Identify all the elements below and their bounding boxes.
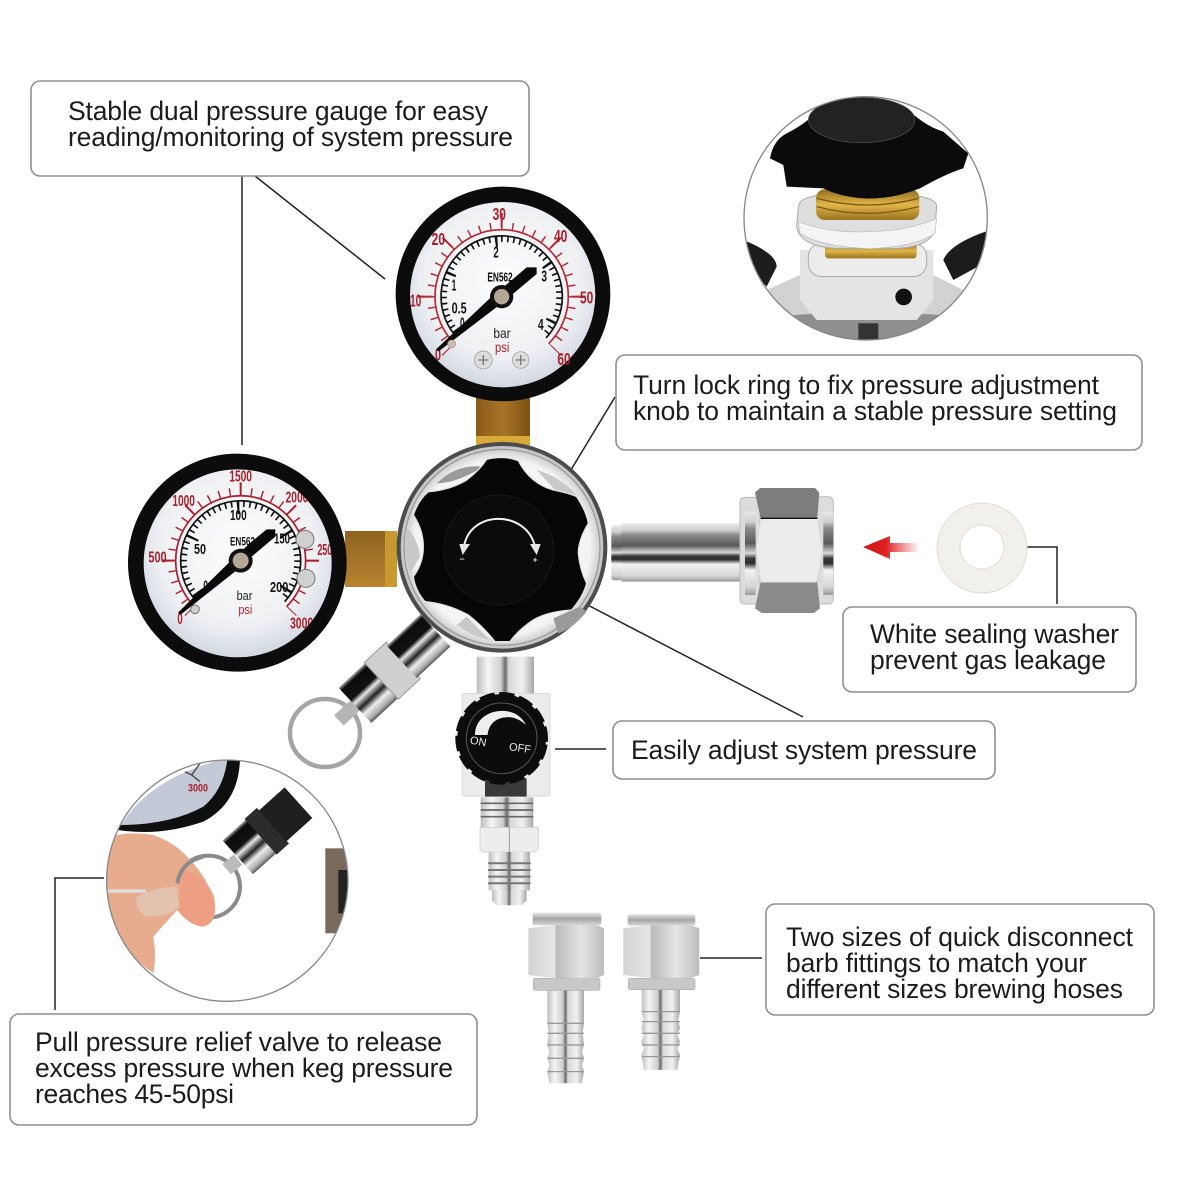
leader line: washer: [1021, 547, 1057, 604]
callout: barb fittings: Two sizes of quick disconnect: [786, 922, 1134, 952]
psi numbers: 3000: [290, 615, 313, 632]
background gauge right: [943, 232, 986, 280]
red arrow to nut: [863, 536, 920, 559]
hex bottom: [755, 582, 820, 613]
red scale arc: [176, 496, 306, 607]
black minor ticks: [184, 504, 297, 599]
relief valve with pull ring: [290, 612, 452, 767]
valve body: [462, 693, 550, 796]
bezel: [396, 187, 610, 401]
callout: lock ring: Turn lock ring to fix pressure adjustment: [633, 370, 1100, 400]
pivot cap: [494, 289, 509, 304]
callout: lock ring: [616, 355, 1142, 450]
scale numbers bar: 4: [538, 317, 544, 334]
callout: adjust pressure: Easily adjust system pressure: [631, 735, 977, 765]
inner housing line: [404, 449, 600, 645]
neck: [477, 657, 534, 695]
bar numbers: 50: [194, 542, 206, 558]
circle contents: [103, 758, 350, 973]
scale numbers psi: 30: [493, 204, 506, 224]
fingertip: [178, 870, 215, 927]
scale numbers psi: 10: [410, 291, 421, 311]
small barb ridges: [642, 1012, 680, 1057]
circle outline: [744, 97, 987, 340]
base shadow: [858, 323, 878, 340]
psi numbers: 2000: [286, 490, 308, 507]
large barb ridges: [547, 1023, 584, 1072]
leader line: gauge callout to top gauge: [255, 176, 385, 279]
red major ticks: [425, 220, 578, 351]
leader line: gauge callout to left gauge: [241, 176, 243, 445]
scale numbers bar: 2: [493, 244, 499, 261]
large fitting top collar: [533, 913, 601, 925]
pull ring: [290, 699, 360, 767]
leader line: on/off valve: [555, 748, 606, 750]
flange shading: [745, 512, 756, 595]
tip: [492, 890, 527, 905]
psi numbers: 1000: [172, 493, 195, 510]
callout: barb fittings: barb fittings to match your: [786, 948, 1087, 978]
nut flange left: [740, 497, 760, 604]
red minor ticks: [172, 491, 310, 609]
3000 label: 3000: [188, 783, 208, 795]
red scale arc: [435, 230, 568, 344]
scale numbers bar: EN562: [487, 271, 513, 285]
circle outline: [107, 760, 348, 1001]
lower thread: [489, 852, 530, 890]
scale numbers bar: 1: [452, 278, 457, 295]
scale numbers psi: [410, 204, 593, 369]
valve body: [322, 612, 452, 739]
red minor ticks: [431, 226, 572, 347]
pivot cap: [233, 553, 249, 569]
scale numbers bar: [452, 244, 547, 334]
dial face: [410, 202, 595, 387]
hex nut: [480, 827, 538, 852]
unit psi: psi: [495, 339, 509, 355]
hex nut edge: [508, 827, 511, 852]
scale numbers bar: 0: [460, 315, 465, 332]
scale numbers psi: 40: [554, 226, 567, 246]
scale numbers psi: 60: [557, 349, 571, 369]
hex nut body: [800, 250, 933, 320]
callout: dual pressure gauge: reading/monitoring of system pressure: [68, 122, 513, 152]
lower thread: [825, 246, 917, 258]
callout: barb fittings: different sizes brewing hoses: [786, 974, 1123, 1004]
right regulator piece: [325, 848, 349, 933]
pull ring: [190, 854, 242, 920]
collar: [611, 525, 622, 580]
psi numbers: [148, 469, 337, 632]
circle background: [107, 760, 348, 1001]
bar numbers: EN562: [230, 534, 255, 548]
knurl: [798, 218, 937, 249]
detail circle: pulling relief valve ring: [103, 758, 350, 1001]
top gauge (0-60 psi): [396, 187, 610, 401]
unit psi: psi: [238, 602, 252, 617]
background gauge left: [747, 242, 777, 287]
bar numbers: 150: [274, 531, 290, 547]
adjustment arrow arc: [464, 519, 535, 547]
right regulator shade: [338, 870, 350, 913]
hole: [895, 289, 912, 305]
white arc indicator: [475, 711, 526, 735]
dark base reflection: [793, 314, 938, 340]
left gauge (0-3000 psi): [128, 454, 347, 672]
off label: OFF: [508, 741, 532, 756]
brass connector: top gauge stem: [476, 398, 530, 450]
dial screws: [191, 530, 315, 614]
small fitting barb: [641, 989, 680, 1070]
callout: lock ring: knob to maintain a stable pressure setting: [633, 396, 1117, 426]
callout: dual pressure gauge: [31, 81, 529, 176]
bar numbers: 200: [270, 580, 288, 596]
upper ridges: [481, 803, 533, 817]
needle: [178, 529, 275, 615]
black scale arc: [181, 501, 301, 602]
chrome housing: [399, 444, 605, 651]
black knob: [413, 457, 588, 642]
nut chrome band: [808, 243, 927, 277]
detail circle: lock ring and adjustment knob: [743, 97, 990, 343]
black minor ticks: [444, 239, 559, 336]
large fitting bottom collar: [533, 978, 600, 990]
hex top: [755, 488, 819, 518]
unit bar: bar: [493, 325, 511, 341]
psi numbers: 2500: [317, 542, 337, 559]
needle pivot: [490, 285, 513, 308]
valve stem: [222, 855, 242, 874]
leader line: relief valve: [55, 878, 104, 1010]
ring front arc: [177, 857, 203, 883]
black on/off knob: [452, 688, 552, 788]
arrow head right: [530, 544, 541, 555]
upper thread: [481, 797, 533, 827]
bezel: [128, 454, 347, 672]
gauge face: [121, 760, 228, 825]
psi numbers: 500: [148, 550, 167, 567]
large fitting barb: [547, 990, 584, 1083]
psi numbers: 1500: [229, 469, 252, 486]
psi numbers: 0: [177, 611, 183, 628]
black scale arc: [441, 236, 562, 338]
black knob: [770, 112, 968, 199]
black stem block: [485, 778, 527, 797]
minus sign: −: [459, 554, 464, 564]
scale marks: [185, 763, 200, 782]
red major ticks: [169, 489, 312, 611]
scale numbers psi: 0: [435, 345, 441, 365]
dial face: [144, 469, 332, 657]
brass thread: [816, 189, 919, 220]
on label: ON: [469, 735, 487, 749]
callout: barb fittings: [766, 904, 1154, 1015]
unit bar: bar: [237, 588, 253, 603]
tube: [621, 523, 743, 582]
brass connector: left gauge stem: [345, 531, 397, 587]
black major ticks: [187, 507, 294, 597]
small fitting hex: [623, 925, 699, 978]
black major ticks: [446, 241, 557, 334]
knob top: [808, 97, 915, 143]
callout: sealing washer: [843, 607, 1136, 692]
dark reflections: [437, 466, 587, 633]
needle: [436, 267, 537, 351]
flange shading right: [823, 512, 833, 595]
central regulator hub and knob: [399, 444, 605, 651]
hex top edge: [761, 516, 817, 520]
valve body: [222, 785, 315, 875]
white sealing washer: [937, 503, 1027, 593]
base plate: [768, 275, 963, 316]
dial markings: [148, 469, 337, 632]
bar numbers: [194, 508, 290, 596]
lock ring: [797, 195, 937, 248]
white edge: [107, 889, 146, 893]
callout: relief valve: Pull pressure relief valve to release: [35, 1027, 442, 1057]
needle pivot: [229, 549, 253, 573]
circle contents: [743, 97, 990, 343]
scale numbers psi: 20: [432, 229, 445, 249]
small fitting bottom collar: [628, 978, 695, 990]
callout: sealing washer: White sealing washer: [870, 619, 1119, 649]
scale numbers bar: 0.5: [452, 300, 467, 317]
housing reflections: [405, 470, 577, 640]
bar numbers: 100: [230, 508, 247, 524]
callout: relief valve: reaches 45-50psi: [35, 1079, 234, 1109]
leader line: lock ring callout: [560, 397, 615, 488]
dial screws: [448, 340, 529, 369]
hand: [103, 833, 215, 973]
callout: relief valve: [10, 1014, 477, 1125]
arrow head left: [459, 544, 470, 555]
plus sign: +: [533, 555, 538, 565]
gauge bezel: [118, 760, 240, 832]
scale numbers psi: 50: [580, 287, 593, 307]
leader line: adjust pressure callout: [580, 601, 803, 717]
callout: relief valve: excess pressure when keg pressure: [35, 1053, 453, 1083]
knob cap: [444, 495, 554, 605]
right outlet arm with hex nut: [611, 488, 833, 613]
scale numbers bar: 3: [541, 269, 547, 286]
callout: adjust pressure: [613, 721, 995, 779]
large fitting hex: [528, 925, 604, 978]
bottom regulator outlet with on/off valve: [452, 657, 552, 905]
leader line: barb fittings: [700, 957, 762, 959]
circle background: [744, 97, 987, 340]
bar numbers: 0: [203, 579, 208, 595]
hose barb fittings: [528, 913, 699, 1083]
small fitting top collar: [628, 914, 695, 926]
callout: dual pressure gauge: Stable dual pressure gauge for easy: [68, 96, 489, 126]
thread ridges: [817, 198, 919, 213]
thread ridges: [488, 863, 531, 883]
hex face center: [756, 518, 823, 581]
callout: sealing washer: prevent gas leakage: [870, 645, 1106, 675]
nut flange right: [817, 497, 833, 604]
thumb nail: [136, 887, 179, 917]
